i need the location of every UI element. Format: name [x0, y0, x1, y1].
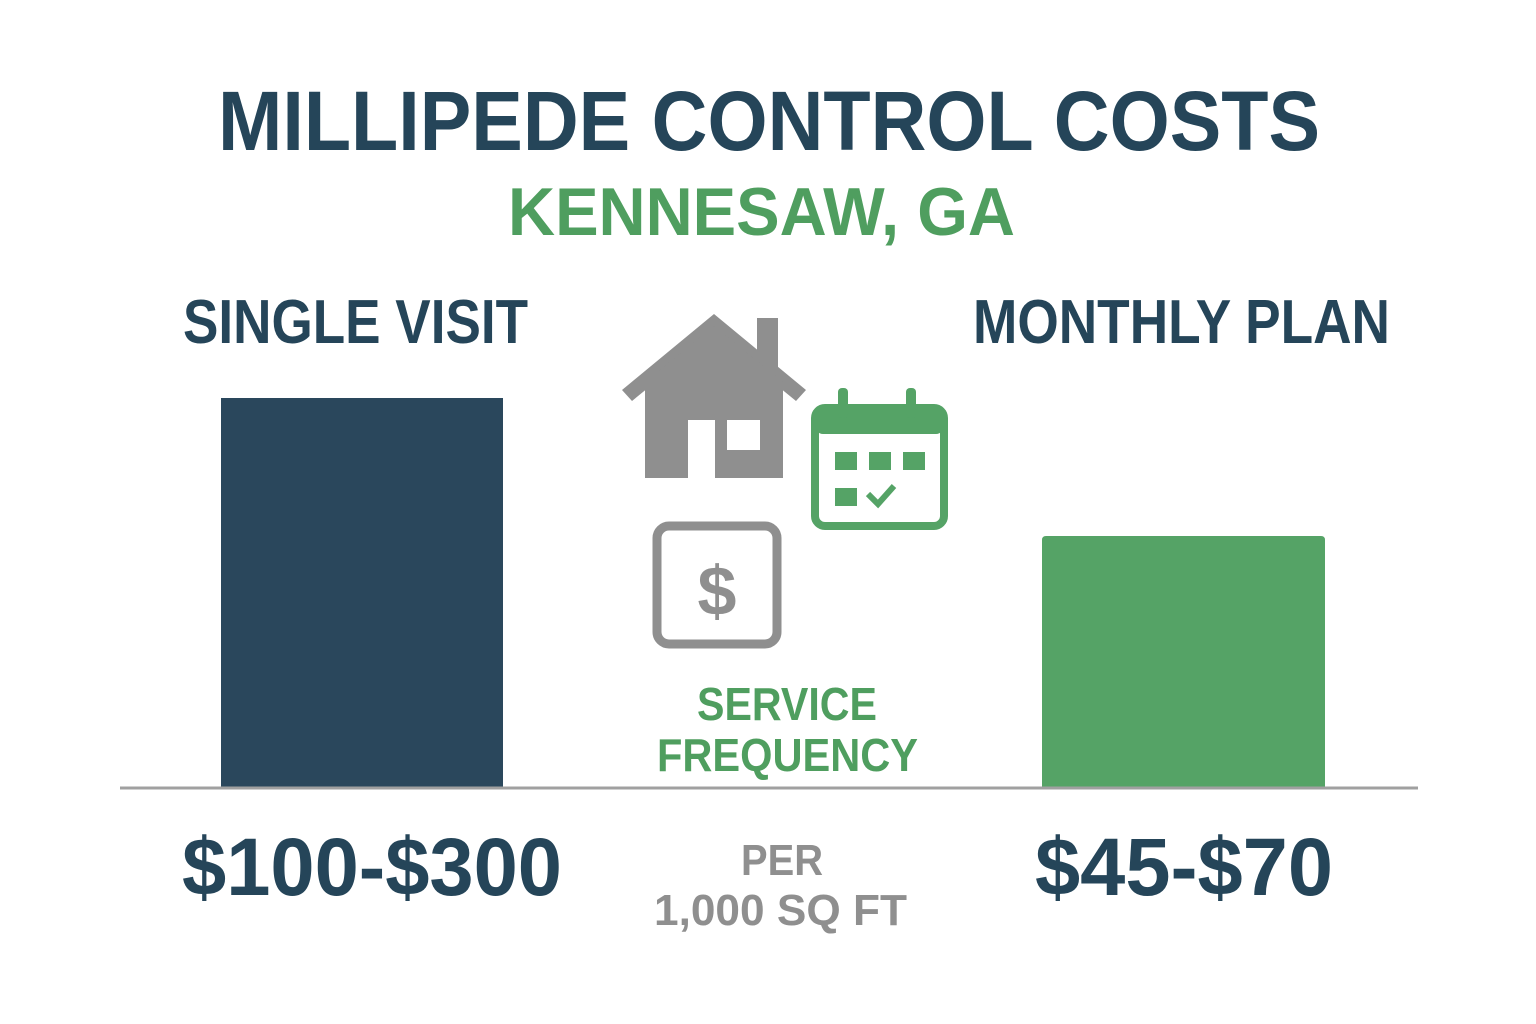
unit label: PER	[741, 836, 823, 885]
label: service frequency: FREQUENCY	[657, 729, 918, 781]
label: service frequency	[657, 678, 918, 781]
subtitle: KENNESAW, GA	[508, 174, 1015, 250]
icon: house	[622, 314, 806, 478]
title: MILLIPEDE CONTROL COSTS	[218, 74, 1320, 168]
bar: single visit	[221, 398, 503, 788]
bar: monthly plan	[1042, 536, 1325, 788]
price: single visit: $100-$300	[182, 822, 562, 913]
unit label: 1,000 SQ FT	[654, 886, 907, 935]
icon: dollar box: $	[698, 552, 736, 630]
label: service frequency: SERVICE	[697, 678, 877, 730]
heading: single visit: SINGLE VISIT	[183, 288, 528, 357]
price: monthly plan: $45-$70	[1035, 822, 1333, 913]
unit label	[654, 836, 907, 935]
icon: calendar	[815, 388, 944, 526]
icon: dollar box	[657, 526, 777, 644]
heading: monthly plan: MONTHLY PLAN	[973, 288, 1390, 357]
